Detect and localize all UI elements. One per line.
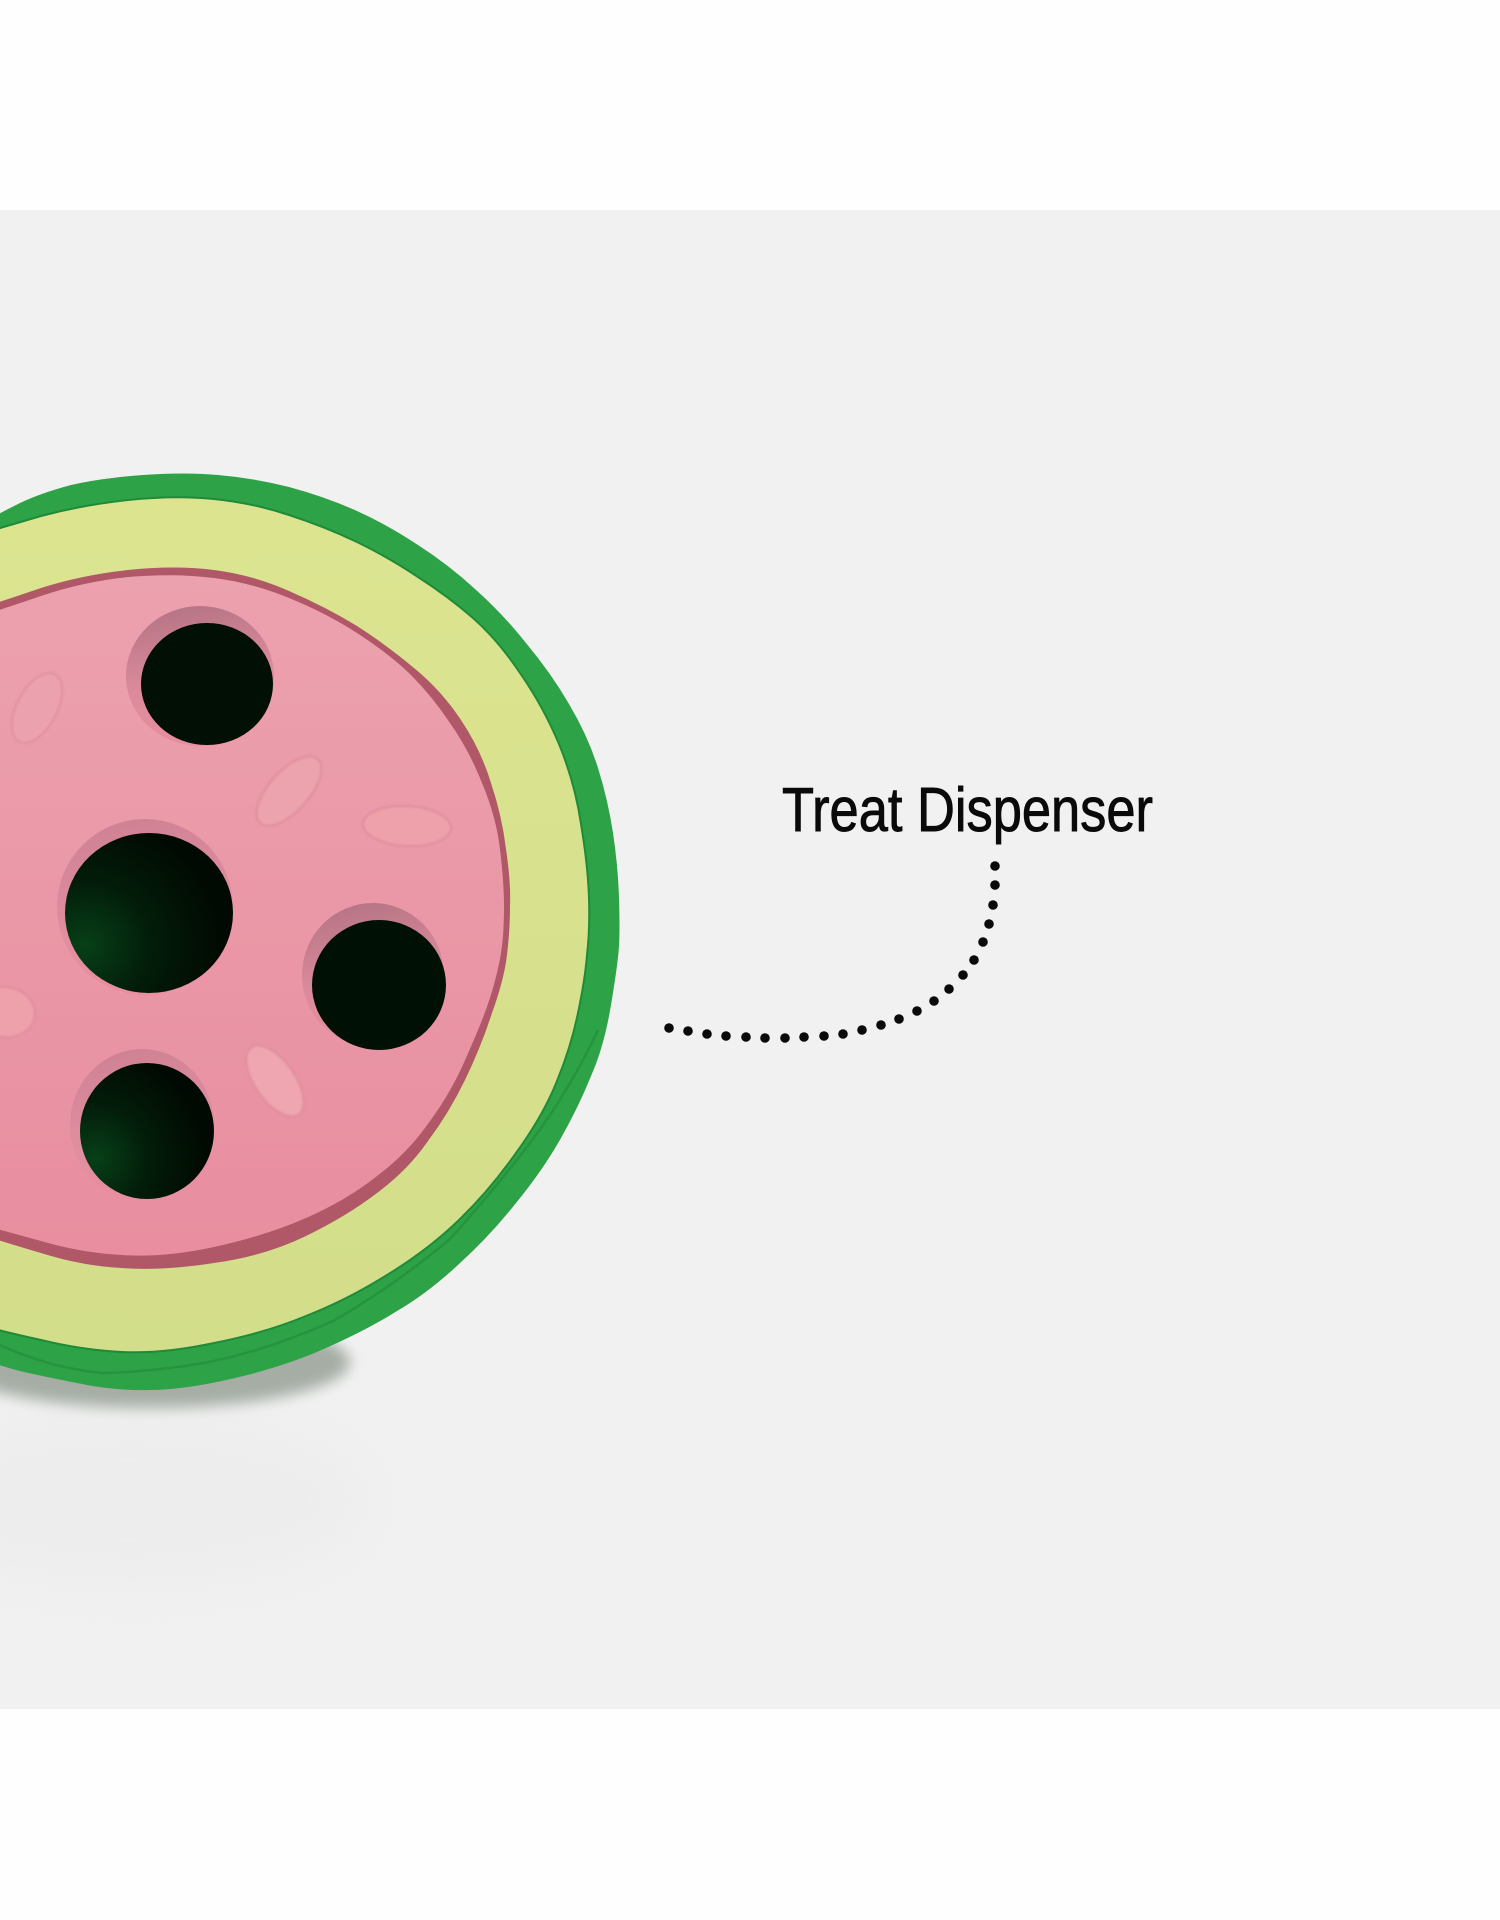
hole 3 right (302, 903, 446, 1050)
seed 4 (0, 982, 39, 1042)
seed 3 (362, 804, 452, 848)
label: Treat Dispenser: Treat Dispenser (782, 776, 1153, 845)
pale yellow ring (0, 497, 589, 1352)
green outer rind (0, 474, 620, 1390)
hole 2 centre (57, 819, 233, 995)
seed 5 (235, 1036, 315, 1126)
seed 1 (2, 665, 72, 751)
hole 4 bottom (70, 1049, 214, 1201)
dotted arrow from toy to label (664, 861, 1000, 1043)
seed 2 (245, 746, 333, 836)
hole 1 top (126, 606, 274, 746)
contact shadow under toy (0, 1316, 350, 1408)
watermelon toy (0, 474, 620, 1390)
pink flesh (0, 575, 504, 1256)
dark groove line in rind (0, 1030, 598, 1373)
panel: grey background (0, 210, 1500, 1709)
dark pink rim (0, 568, 510, 1269)
soft floor shadow (0, 1415, 370, 1585)
